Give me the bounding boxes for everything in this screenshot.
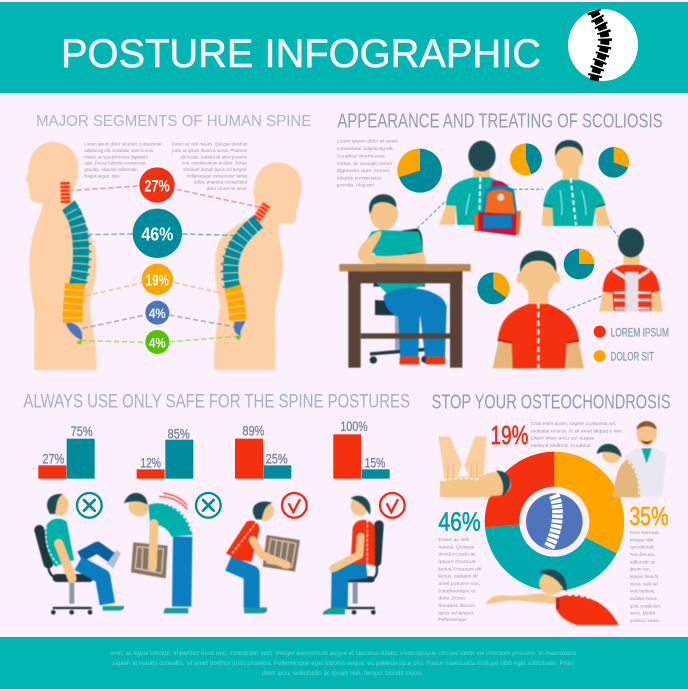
panel: stop your osteochondrosis — [432, 391, 671, 625]
figure: doctor and patient — [597, 421, 667, 497]
title: POSTURE INFOGRAPHIC — [61, 32, 541, 76]
figure: lying man — [486, 569, 619, 625]
figure: bending over — [124, 493, 193, 613]
text block: scoliosis lorem: Curabitur viverra eros — [337, 153, 385, 159]
footer band — [0, 637, 688, 689]
text block: 46 percent lorem: tincidunt dictum — [438, 603, 475, 609]
text block: 46 percent lorem: mauris. Quisque — [438, 544, 475, 550]
27 percent — [139, 167, 175, 203]
text block: 19 percent lorem: Diam vitae arcu vel augue — [531, 436, 595, 442]
figure: back view with backpack — [439, 141, 521, 236]
bar chart: upright sitting — [333, 418, 390, 479]
icon: wrong mark 1 — [77, 493, 102, 518]
figure: boy sitting at desk — [339, 194, 471, 368]
text block: left lorem: Lorem ipsum dolor sit amet, consectetur — [84, 142, 162, 148]
pie charts — [397, 143, 629, 304]
text block: 46 percent lorem: amet posuere non, — [438, 581, 480, 587]
text block: 35 percent lorem: ipsum non, — [630, 567, 651, 573]
text block: 35 percent lorem: Proin diam arcu, — [630, 552, 655, 558]
text block: 46 percent lorem: lacus vel tempor. — [438, 610, 474, 616]
dashed connector lines — [417, 189, 618, 310]
19 percent — [142, 264, 173, 295]
panel: major segments of human spine — [26, 113, 311, 370]
panel: always use only safe postures — [23, 391, 410, 615]
heading: postures: ALWAYS USE ONLY SAFE FOR THE SPINE POSTURES — [23, 391, 410, 412]
footer text: diam arcu, sollicitudin ac ipsum non, tempor blandit metus. — [262, 671, 424, 677]
bar chart: upright sitting: 100% — [340, 418, 368, 434]
text block: 46 percent lorem: condimentum et — [438, 588, 476, 594]
4 percent green — [145, 330, 169, 354]
icon: wrong mark 2 — [196, 493, 221, 518]
text block: 46 percent lorem: lectus, sodales sit — [438, 574, 478, 580]
stat: 35 percent: 35% — [629, 501, 668, 531]
stat: 19 percent: 19% — [491, 420, 528, 450]
stat: 46 percent — [438, 507, 482, 623]
text block: right lorem: Donec ac velit mauris. Quisque tincidunt — [172, 142, 248, 148]
text block: scoliosis lorem: Lorem ipsum dolor sit amet, — [337, 138, 399, 144]
dashed connector lines — [68, 186, 260, 342]
footer text — [110, 651, 577, 677]
4 percent green: 4% — [149, 334, 166, 350]
heading: major segments: MAJOR SEGMENTS OF HUMAN SPINE — [36, 113, 311, 130]
text block: right lorem: dolor ornare sit amet. — [207, 186, 247, 192]
bar chart: bending: 85% — [168, 425, 190, 441]
text block: right lorem — [171, 142, 248, 192]
text block: left lorem — [84, 142, 162, 179]
icon: backpack — [474, 181, 521, 236]
header banner — [0, 2, 688, 93]
panel: appearance and treating of scoliosis — [337, 111, 669, 368]
left spine — [65, 182, 90, 344]
text block: 46 percent lorem: Pellentesque — [438, 617, 467, 623]
figure: front view teal shirt — [542, 140, 611, 226]
text block: right lorem: elit lectus, sodales sit amet posuere — [181, 154, 248, 160]
text block: 35 percent lorem: erat facilisis, — [630, 589, 655, 595]
bar chart: squat lift: 25% — [266, 450, 288, 466]
text block: 35 percent lorem: sodales metus — [630, 596, 657, 602]
legend — [594, 326, 669, 363]
bar chart: sitting reclined — [38, 423, 95, 479]
bar chart: sitting reclined: 27% — [42, 450, 64, 466]
text block: 35 percent lorem: tristique nibh — [630, 537, 654, 543]
bar chart: bending — [137, 425, 193, 479]
text block: right lorem: tellus, pharetra consectetur — [194, 180, 248, 186]
stat: 46 percent: 46% — [438, 507, 481, 537]
stat: 35 percent — [629, 501, 668, 624]
19 percent: 19% — [146, 272, 169, 289]
27 percent: 27% — [144, 177, 170, 196]
text block: 46 percent lorem: tincidunt justo ac — [438, 552, 476, 558]
text block: scoliosis lorem: consectetur adipiscing elit. — [337, 146, 394, 152]
text block: 35 percent lorem: arcu. Morbi — [630, 611, 655, 617]
icon: spine in white oval — [568, 9, 638, 82]
bar chart: bending: 12% — [140, 454, 161, 470]
text block: 46 percent lorem: Donec ac velit — [438, 537, 470, 543]
text block: 35 percent lorem: quis, vestibulum — [630, 603, 661, 609]
icon: correct mark 1 — [282, 493, 307, 518]
figure: upright sitting — [323, 496, 379, 615]
text block: 46 percent lorem: dolor. Donec — [438, 596, 466, 602]
text block: 35 percent lorem: metus. Nulla vel — [630, 581, 658, 587]
text block: scoliosis lorem: dignissim quis. Donec — [337, 168, 391, 174]
text block: scoliosis lorem: lobortis consectetur — [337, 175, 382, 181]
text block: right lorem: justo ac ipsum rhoncus luctus. Praesent — [171, 148, 248, 154]
figure: massage — [438, 437, 511, 497]
text block: 35 percent lorem: Fusce malesuada — [630, 530, 659, 536]
figure: squat lifting — [226, 501, 300, 613]
text block: 19 percent lorem: eleifend eleifend. Curabitur — [531, 443, 591, 449]
46 percent: 46% — [141, 224, 174, 245]
icon: correct mark 2 — [380, 493, 405, 518]
text block: 46 percent lorem — [438, 537, 482, 623]
text block: 35 percent lorem: pulvinar mauris. — [630, 618, 661, 624]
text block: 35 percent lorem: eget sollicitudin. — [630, 545, 655, 551]
46 percent — [133, 209, 182, 258]
4 percent blue — [145, 301, 169, 325]
4 percent blue: 4% — [149, 305, 166, 321]
figure: front view red shirt — [493, 251, 584, 368]
figure: back view with red brace — [599, 228, 663, 311]
right body silhouette — [214, 162, 302, 370]
text block: right lorem: Pellentesque consectetur varius — [187, 173, 248, 179]
text block: right lorem: non, condimentum at dolor. Donec — [182, 161, 248, 167]
text block: 19 percent lorem: Cras enim quam, sagittis a placerat vel, — [531, 421, 616, 427]
text block: 35 percent lorem — [630, 530, 661, 624]
text block: left lorem: quis. Donec lobortis consectetur — [84, 161, 146, 167]
icon: spine in centre — [548, 495, 557, 548]
right spine — [222, 205, 267, 341]
footer text: sapien at mauris convallis, sit amet porttitor justo pharetra. Pellentesque eget lobortis neque, eu pellentesque orci. Fusce malesuada tristique nibh eget sollicitudin. Proin — [112, 661, 574, 667]
legend item: dolor sit: DOLOR SIT — [611, 349, 654, 363]
text block: 46 percent lorem: ipsum rhoncus — [438, 559, 476, 565]
bar chart: squat lift: 89% — [242, 423, 264, 439]
text block: 19 percent lorem — [531, 421, 623, 449]
text block: left lorem: adipiscing elit. Curabitur viverra eros — [84, 148, 154, 154]
text block: scoliosis lorem: metus, ac suscipit metus — [337, 161, 393, 167]
percentage circles — [133, 167, 182, 354]
text block: right lorem: tincidunt dictum lacus vel tempor. — [183, 167, 247, 173]
text block: 46 percent lorem: luctus. Praesent elit — [438, 566, 482, 572]
bar chart: sitting reclined: 75% — [71, 423, 93, 439]
figure: slouched sitting — [39, 494, 124, 615]
donut chart — [485, 452, 624, 591]
bar chart: squat lift — [235, 423, 291, 479]
text block: left lorem: metus, ac suscipit metus dignissim — [84, 154, 148, 160]
footer text: onec ac ligula efficitur, imperdiet risus nec, sollicitudin sem. Integer elementum augue et faucibus mollis. Pellentesque ultrices tortor vel interdum posuere. In malesuada — [110, 651, 577, 657]
text block: scoliosis lorem — [337, 138, 399, 189]
text block: scoliosis lorem: gravida. Aliquam — [337, 183, 374, 189]
left body silhouette — [26, 142, 97, 370]
text block: left lorem: feugiat augue, quis. — [84, 173, 120, 179]
text block: 35 percent lorem: sollicitudin ac — [630, 559, 656, 565]
text block: 35 percent lorem: tempor blandit — [630, 574, 659, 580]
text block: left lorem: gravida. Aliquam sollicitudin — [84, 167, 138, 173]
text block: 19 percent lorem: molestie et eros. In sit amet aliquet e nim. — [531, 428, 623, 434]
bar chart: upright sitting: 15% — [365, 454, 385, 470]
stat: 19 percent — [491, 420, 623, 450]
